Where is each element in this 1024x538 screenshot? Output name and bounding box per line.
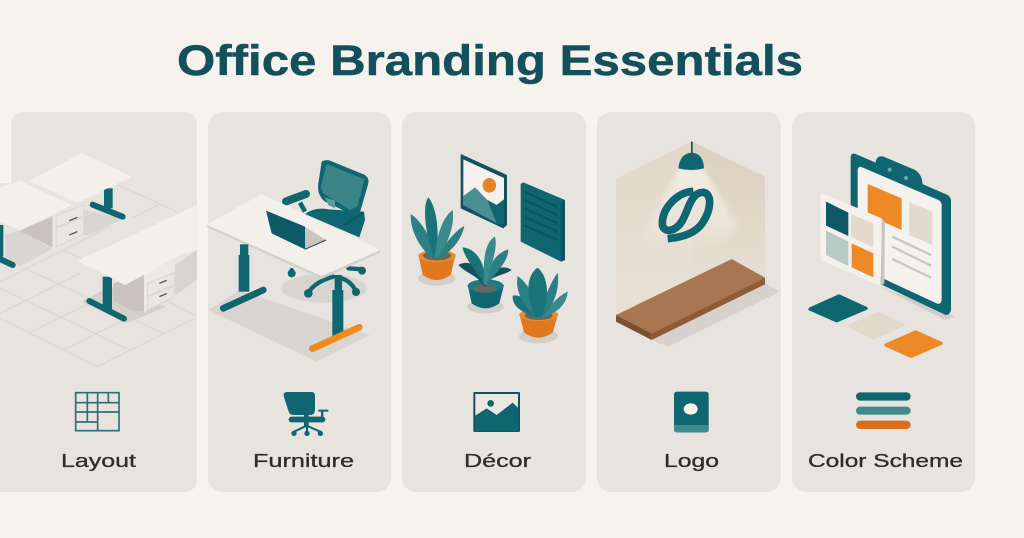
icon: color bars xyxy=(856,392,911,429)
plant: teal pot xyxy=(458,237,512,313)
light cone xyxy=(643,168,737,257)
panel: decor xyxy=(402,112,586,492)
lamp xyxy=(678,142,704,170)
title: Office Branding Essentials xyxy=(177,37,803,85)
plant: orange pot right xyxy=(513,268,568,343)
panel: color scheme xyxy=(792,112,975,492)
icon: logo badge xyxy=(674,392,709,432)
label: layout: Layout xyxy=(61,450,136,471)
shelf xyxy=(616,259,765,340)
illustration: desks on a tiled floor xyxy=(0,154,197,367)
label: decor: Décor xyxy=(464,450,531,471)
icon: picture xyxy=(473,392,520,432)
illustration: clipboard and swatches xyxy=(810,154,955,356)
label: logo: Logo xyxy=(664,450,719,471)
palette card xyxy=(821,192,885,286)
swatches xyxy=(810,296,941,356)
icon: office chair xyxy=(284,392,328,436)
logo mark xyxy=(662,191,710,239)
illustration: logo wall with lamp and shelf xyxy=(616,142,780,347)
label: color scheme: Color Scheme xyxy=(808,450,963,471)
illustration: wall art and plants xyxy=(411,154,568,343)
panel: furniture xyxy=(207,112,391,492)
label: furniture: Furniture xyxy=(253,450,354,471)
icon: layout grid xyxy=(76,393,119,431)
wall picture xyxy=(461,154,507,228)
clipboard xyxy=(851,154,951,315)
wall louver panel xyxy=(521,182,565,262)
illustration: desk, chair and laptop xyxy=(207,160,380,362)
panel: layout xyxy=(0,112,197,492)
plant: orange pot left xyxy=(411,197,464,286)
panel: logo xyxy=(597,112,781,492)
